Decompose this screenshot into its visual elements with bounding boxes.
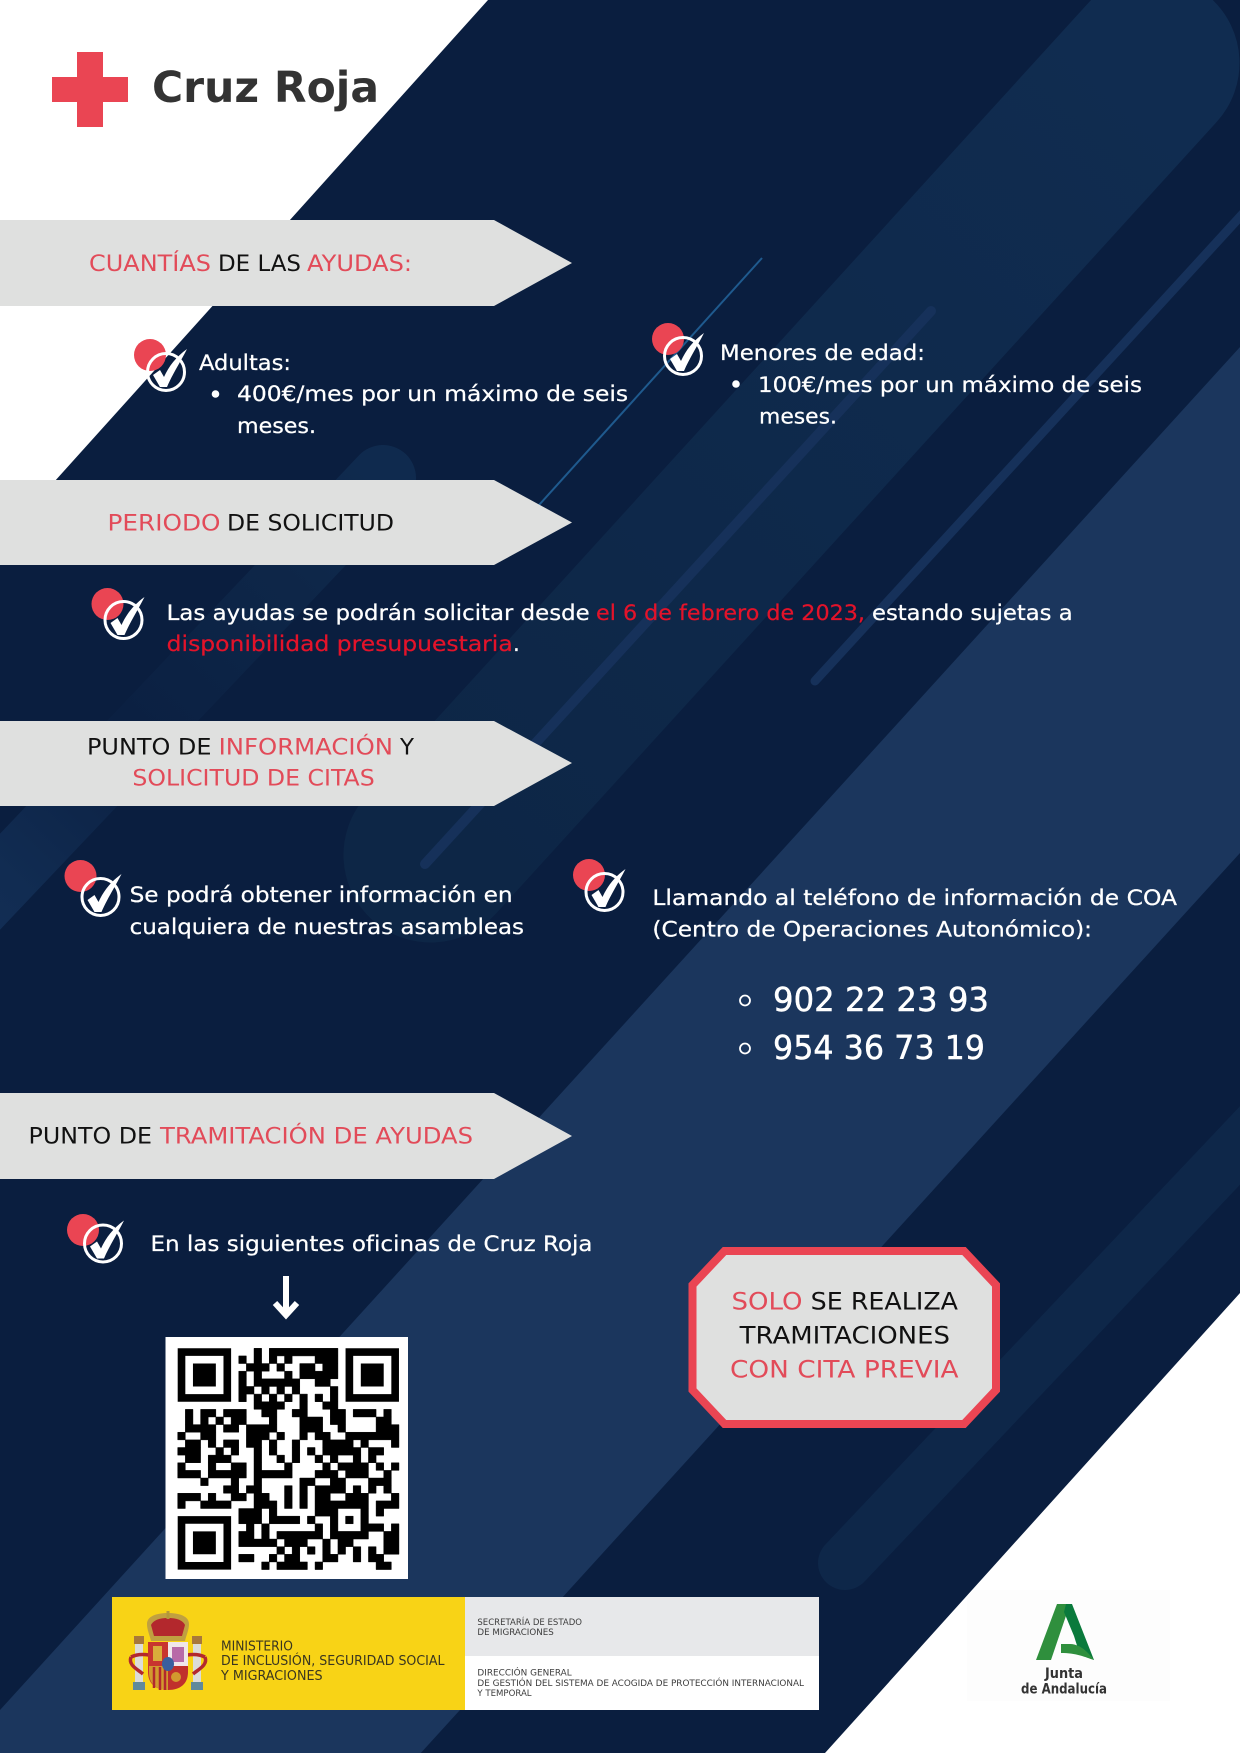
- text: adultas: Adultas:: [199, 351, 291, 376]
- text: plazo de solicitud: disponibilidad presupuestaria: [167, 632, 513, 657]
- text: menores de edad: [720, 341, 1142, 430]
- text: plazo de solicitud: el 6 de febrero de 2023,: [596, 601, 865, 626]
- icon: coat of arms: [130, 1611, 206, 1690]
- text: asambleas: [130, 883, 524, 940]
- logo: Cruz Roja: Cruz Roja: [152, 63, 379, 113]
- text: dirección general: [476, 1667, 804, 1699]
- text: asambleas: Se podrá obtener información en: [130, 883, 513, 908]
- icon: check adultas: [134, 339, 187, 390]
- banner: cuantías de las ayudas: [0, 220, 572, 306]
- banner: punto de tramitación: TRAMITACIÓN DE AYUDAS: [159, 1124, 473, 1150]
- banner: punto de tramitación: PUNTO DE: [28, 1124, 152, 1150]
- callout: solo con cita previa: SE REALIZA: [811, 1288, 959, 1316]
- text: oficinas: En las siguientes oficinas de Cruz Roja: [150, 1232, 592, 1257]
- banner: punto de información: SOLICITUD DE CITAS: [132, 766, 375, 792]
- panel: asambleas: [64, 860, 524, 940]
- text: adultas: meses.: [237, 414, 316, 439]
- text: secretaría: DE MIGRACIONES: [477, 1628, 554, 1638]
- callout: solo con cita previa: CON CITA PREVIA: [730, 1356, 959, 1384]
- text: dirección general: DIRECCIÓN GENERAL: [477, 1667, 572, 1679]
- text: Junta de Andalucía: Junta: [1044, 1666, 1083, 1682]
- icon: check teléfono: [573, 859, 626, 910]
- text: menores de edad: 100€/mes por un máximo de seis: [758, 373, 1142, 398]
- panel: teléfono COA: [573, 859, 1177, 1067]
- banner: cuantías de las ayudas: CUANTÍAS: [89, 251, 211, 277]
- text: ministerio: DE INCLUSIÓN, SEGURIDAD SOCIAL: [221, 1653, 445, 1669]
- banner: cuantías de las ayudas: AYUDAS:: [307, 252, 412, 277]
- banner: periodo de solicitud: PERIODO: [108, 512, 220, 536]
- text: secretaría: [477, 1616, 582, 1638]
- phone numbers: [740, 980, 989, 1067]
- text: teléfono COA: [652, 886, 1177, 942]
- logo: Junta de Andalucía: [967, 1590, 1170, 1701]
- panel: oficinas: [67, 1214, 592, 1262]
- icon: green A: [1036, 1604, 1094, 1660]
- icon: check periodo: [92, 588, 144, 638]
- text: adultas: [199, 351, 628, 439]
- panel: periodo: [92, 588, 1073, 657]
- text: plazo de solicitud: .: [513, 632, 520, 657]
- text: asambleas: cualquiera de nuestras asambleas: [130, 915, 524, 940]
- panel: adultas: [134, 339, 628, 439]
- phone numbers: 954 36 73 19: [773, 1028, 985, 1067]
- callout: solo con cita previa: SOLO: [732, 1288, 802, 1316]
- text: dirección general: DE GESTIÓN DEL SISTEMA DE ACOGIDA DE PROTECCIÓN INTERNACIONAL: [477, 1677, 804, 1689]
- banner: periodo de solicitud: DE SOLICITUD: [227, 512, 394, 536]
- text: plazo de solicitud: [167, 601, 1073, 657]
- logo: Cruz Roja: [52, 52, 379, 127]
- icon: check menores: [652, 323, 704, 374]
- icon: check oficinas: [67, 1214, 124, 1262]
- QR code: [166, 1337, 408, 1579]
- text: Junta de Andalucía: [1021, 1666, 1107, 1697]
- logo: Ministerio de Inclusión: [112, 1597, 819, 1710]
- banner: punto de información: PUNTO DE: [87, 736, 212, 760]
- text: ministerio: Y MIGRACIONES: [220, 1669, 323, 1684]
- phone numbers: 902 22 23 93: [773, 980, 989, 1019]
- text: teléfono COA: Llamando al teléfono de información de COA: [652, 886, 1177, 911]
- text: menores de edad: Menores de edad:: [720, 341, 925, 366]
- text: dirección general: Y TEMPORAL: [476, 1689, 532, 1699]
- text: Junta de Andalucía: de Andalucía: [1021, 1681, 1107, 1697]
- text: menores de edad: meses.: [759, 404, 837, 430]
- banner: punto de tramitación: [0, 1093, 572, 1179]
- text: adultas: 400€/mes por un máximo de seis: [237, 382, 628, 407]
- arrow: down to QR: [275, 1276, 297, 1315]
- text: plazo de solicitud: Las ayudas se podrán solicitar desde: [167, 601, 590, 626]
- banner: punto de información: [0, 721, 572, 806]
- text: ministerio: MINISTERIO: [221, 1640, 293, 1655]
- text: teléfono COA: (Centro de Operaciones Autonómico):: [652, 918, 1092, 942]
- icon: check asambleas: [64, 860, 122, 916]
- panel: menores de edad: [652, 323, 1142, 430]
- callout: solo con cita previa: [692, 1251, 996, 1424]
- text: secretaría: SECRETARÍA DE ESTADO: [477, 1616, 582, 1628]
- text: plazo de solicitud: estando sujetas a: [872, 601, 1073, 626]
- banner: cuantías de las ayudas: DE LAS: [218, 252, 301, 277]
- text: ministerio: [220, 1640, 445, 1684]
- callout: solo con cita previa: TRAMITACIONES: [739, 1322, 950, 1350]
- banner: periodo de solicitud: [0, 480, 572, 565]
- banner: punto de información: Y: [399, 736, 415, 760]
- banner: punto de información: INFORMACIÓN: [219, 734, 393, 760]
